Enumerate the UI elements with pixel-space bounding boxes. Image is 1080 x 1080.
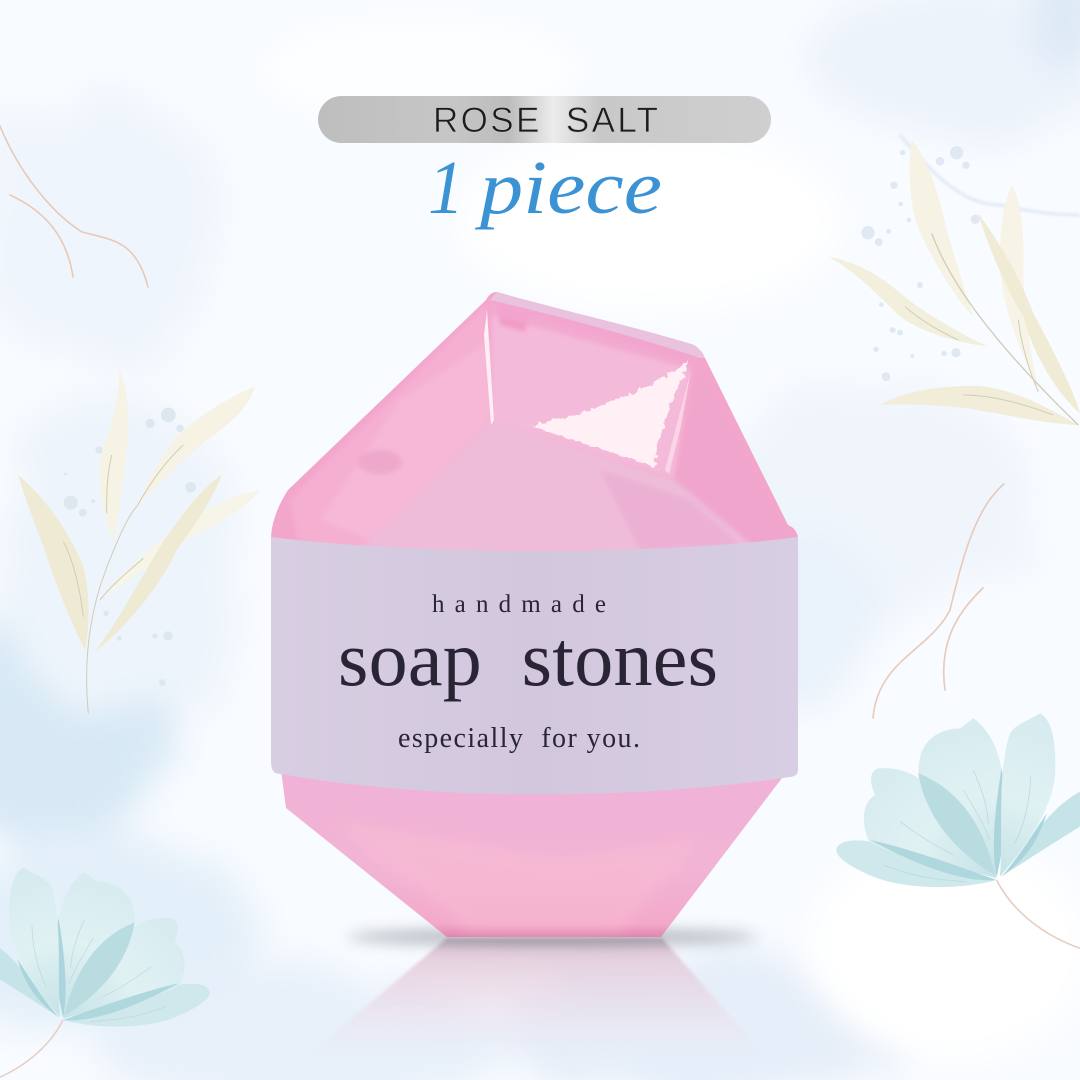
band text: handmade: handmade (432, 591, 606, 618)
pill text: ROSE SALT (433, 101, 658, 140)
subtitle: 1 piece (428, 146, 662, 230)
leaf branch left (18, 368, 260, 713)
soap contact shadow (347, 928, 757, 946)
twig top left (0, 126, 148, 287)
soap upper body (271, 292, 798, 551)
flower bottom left (0, 868, 210, 1080)
band text: soap stones: soap stones (338, 615, 718, 702)
subtitle: 1 piece: 1 (428, 146, 464, 230)
soap lower body (281, 770, 782, 937)
flower right (836, 713, 1080, 948)
title pill (318, 96, 771, 143)
label band (271, 537, 798, 794)
leaf branch top right (828, 140, 1080, 425)
soap reflection (300, 938, 770, 1062)
band text: especially for you: especially for you. (398, 723, 640, 754)
soap stone (260, 285, 805, 937)
twig right (873, 484, 1004, 718)
subtitle: 1 piece: piece (474, 146, 662, 230)
soap lower facet (330, 820, 700, 930)
